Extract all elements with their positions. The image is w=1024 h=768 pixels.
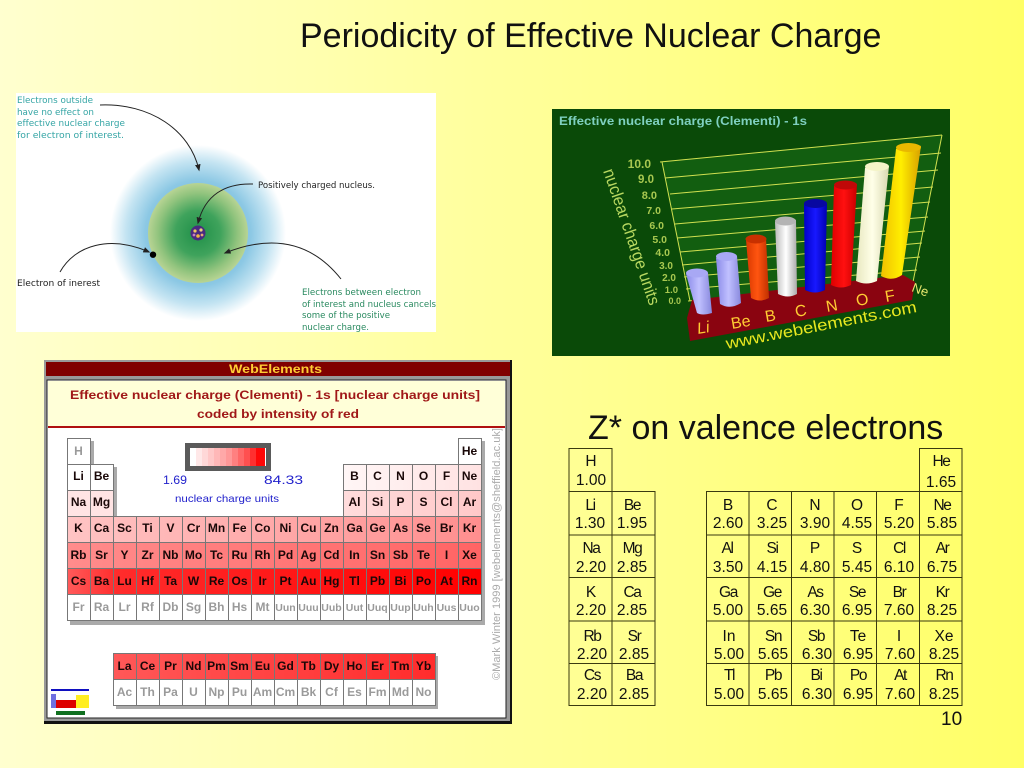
- y-axis tick labels: 2.0: [662, 273, 676, 284]
- element labels on base: C: [794, 302, 808, 321]
- period 2 values: 3.25: [757, 515, 787, 532]
- period 4 values: [576, 584, 957, 619]
- period 7 symbols: Lr: [118, 600, 131, 614]
- legend colour scale: nuclear charge units: [175, 493, 279, 505]
- y-axis tick labels: 8.0: [642, 190, 657, 202]
- period 5 values: In: [723, 628, 735, 645]
- period 3 values: S: [852, 540, 862, 557]
- chart title: Effective nuclear charge (Clementi) - 1s: [559, 116, 807, 128]
- period 6 values: Pb: [765, 667, 782, 684]
- element labels on base: N: [825, 297, 839, 316]
- lanthanides and actinides: Md: [392, 685, 409, 699]
- legend colour scale: [163, 443, 303, 505]
- element symbols: Rn: [462, 574, 478, 588]
- y-axis tick labels: 7.0: [646, 205, 661, 217]
- element symbols: Cd: [324, 548, 340, 562]
- period 5 values: 7.60: [885, 646, 915, 663]
- lanthanides and actinides: [113, 653, 438, 709]
- window title: WebElements: [229, 362, 322, 376]
- table grid: [569, 448, 962, 706]
- period 5 values: 2.20: [577, 646, 607, 663]
- period 6 values: Rn: [935, 667, 953, 684]
- period 2 values: C: [766, 497, 778, 514]
- period 5 values: Xe: [935, 628, 953, 645]
- table header: [48, 381, 505, 428]
- icon: nucleus: [190, 226, 206, 240]
- element symbols: Tc: [210, 548, 223, 562]
- period 1 values: [576, 453, 956, 491]
- element symbols: Sb: [393, 548, 408, 562]
- period 3 values: [576, 540, 957, 576]
- lanthanides and actinides: Cf: [325, 685, 339, 699]
- lanthanides and actinides: Tb: [301, 659, 316, 673]
- period 7 symbols: Uuo: [459, 602, 480, 614]
- lanthanides and actinides: Yb: [416, 659, 431, 673]
- period 4 values: Ga: [719, 584, 739, 601]
- element symbols: As: [393, 521, 408, 535]
- period 2 values: 5.20: [884, 515, 914, 532]
- lanthanides and actinides: Dy: [324, 659, 339, 673]
- electron of interest: [150, 252, 156, 258]
- period 4 values: 5.65: [757, 602, 787, 619]
- element symbols: Mg: [93, 495, 110, 509]
- period 2 values: 1.30: [575, 515, 605, 532]
- element symbols: Rh: [254, 548, 270, 562]
- label: electrons between: of interest and nucleus cancels: [302, 300, 436, 310]
- period 3 values: Al: [722, 540, 733, 557]
- period 7 symbols: Fr: [72, 600, 85, 614]
- period 5 values: Sn: [765, 628, 782, 645]
- element symbols: Xe: [462, 548, 477, 562]
- element symbols: N: [396, 469, 405, 483]
- element symbols: Ne: [462, 469, 477, 483]
- period 7 symbols: Sg: [186, 600, 201, 614]
- lanthanides and actinides: Pm: [207, 659, 226, 673]
- y-axis tick labels: 10.0: [628, 157, 651, 171]
- copyright side text: ©Mark Winter 1999 [webelements@sheffield.ac.uk]: [491, 428, 503, 680]
- period 2 values: B: [723, 497, 733, 514]
- period 6 values: Cs: [584, 667, 602, 684]
- element symbols: P: [396, 495, 405, 509]
- element symbols: Bi: [394, 574, 406, 588]
- element symbols: Sn: [370, 548, 385, 562]
- element symbols: Y: [120, 548, 129, 562]
- element symbols: I: [445, 548, 448, 562]
- element symbols: Pt: [280, 574, 292, 588]
- lanthanides and actinides: Cm: [276, 685, 295, 699]
- period 6 values: 5.65: [758, 686, 788, 703]
- lanthanides and actinides: Gd: [277, 659, 294, 673]
- arrow: outside electrons: [100, 105, 199, 170]
- period 3 values: 3.50: [713, 559, 743, 576]
- y-axis tick labels: 5.0: [652, 234, 667, 246]
- period 6 values: 2.20: [577, 686, 607, 703]
- label: electron of interest: Electron of inerest: [17, 279, 100, 289]
- period 6 values: 8.25: [929, 686, 959, 703]
- chart gridlines: [660, 135, 942, 301]
- element symbols: Ba: [94, 574, 109, 588]
- lanthanides and actinides: La: [117, 659, 132, 673]
- lanthanides and actinides: Np: [208, 685, 224, 699]
- period 1 values: H: [585, 453, 597, 470]
- period 4 values: 6.95: [842, 602, 872, 619]
- period 2 values: O: [851, 497, 863, 514]
- lanthanides and actinides: Tm: [392, 659, 410, 673]
- period 3 values: 2.85: [617, 559, 647, 576]
- element symbols: Cu: [300, 521, 316, 535]
- period 6 values: Ba: [626, 667, 644, 684]
- element symbols: Cr: [187, 521, 200, 535]
- lanthanides and actinides: Sm: [230, 659, 249, 673]
- lanthanides and actinides: Am: [253, 685, 272, 699]
- period 1 values: 1.00: [576, 472, 606, 489]
- title: Periodicity of Effective Nuclear Charge: [300, 17, 881, 55]
- legend colour scale: 1.69: [163, 473, 187, 487]
- period 7 symbols: Uun: [275, 602, 296, 614]
- element symbols: Zr: [142, 548, 154, 562]
- period 4 values: K: [586, 584, 597, 601]
- lanthanides and actinides: Nd: [186, 659, 202, 673]
- lanthanides and actinides: U: [189, 685, 198, 699]
- element symbols: Sr: [95, 548, 108, 562]
- element symbols: Zn: [324, 521, 339, 535]
- y-axis tick labels: 6.0: [649, 220, 664, 232]
- element symbols: Se: [416, 521, 431, 535]
- period 5 values: 2.85: [619, 646, 649, 663]
- label: electrons between: nuclear charge.: [302, 323, 369, 333]
- period 1 values: He: [932, 453, 950, 470]
- element symbols: O: [419, 469, 428, 483]
- label: electrons outside: have no effect on: [17, 108, 94, 118]
- cell dividers: [67, 464, 481, 620]
- element symbols: Ag: [300, 548, 316, 562]
- period 2 values: F: [894, 497, 904, 514]
- lanthanides and actinides: Pa: [163, 685, 178, 699]
- period 5 values: Te: [850, 628, 866, 645]
- lanthanides and actinides: Pu: [232, 685, 247, 699]
- y-axis tick labels: 9.0: [638, 174, 654, 186]
- period 7 symbols: Uuh: [413, 602, 434, 614]
- element symbols: Si: [372, 495, 383, 509]
- period 7 symbols: Ra: [94, 600, 109, 614]
- y-axis tick labels: 4.0: [655, 247, 670, 259]
- arrow: nucleus: [198, 184, 253, 223]
- period 5 values: 6.95: [843, 646, 873, 663]
- element labels on base: Ne: [910, 280, 931, 300]
- period 3 values: 2.20: [576, 559, 606, 576]
- periodic table main grid: [67, 438, 485, 625]
- heading: valence electrons: Z* on valence electrons: [588, 409, 943, 447]
- period 2 values: Be: [624, 497, 641, 514]
- element symbols: Ge: [369, 521, 386, 535]
- period 6 values: 6.95: [843, 686, 873, 703]
- label: electrons between: some of the positive: [302, 311, 390, 321]
- element symbols: Au: [300, 574, 316, 588]
- element symbols: Sc: [117, 521, 132, 535]
- element symbols: Ar: [463, 495, 476, 509]
- period 3 values: Mg: [623, 540, 642, 557]
- period 4 values: 5.00: [713, 602, 743, 619]
- period 5 values: Sr: [628, 628, 642, 645]
- period 4 values: Ge: [763, 584, 782, 601]
- lanthanides and actinides: Es: [347, 685, 362, 699]
- element symbols: In: [349, 548, 360, 562]
- lanthanides and actinides: Pr: [164, 659, 177, 673]
- element labels on base: [696, 280, 931, 338]
- element symbols: Ta: [164, 574, 177, 588]
- period 3 values: 5.45: [842, 559, 872, 576]
- period 3 values: Na: [582, 540, 601, 557]
- lanthanides and actinides: Bk: [301, 685, 316, 699]
- element symbols: Kr: [463, 521, 476, 535]
- y-axis tick labels: 1.0: [665, 285, 678, 296]
- panel: 3D bar chart: [552, 109, 950, 356]
- element labels on base: O: [855, 291, 870, 310]
- period 3 values: 6.10: [884, 559, 914, 576]
- period 2 values: 1.95: [617, 515, 647, 532]
- legend colour scale: 84.33: [264, 473, 303, 487]
- period 3 values: Cl: [893, 540, 906, 557]
- period 5 values: Rb: [583, 628, 601, 645]
- bars: [686, 143, 921, 314]
- period 7 symbols: Uub: [321, 602, 342, 614]
- element symbols: Ca: [94, 521, 109, 535]
- table header: Effective nuclear charge (Clementi) - 1s [nuclear charge units]: [70, 388, 480, 402]
- element symbols: Hf: [141, 574, 155, 588]
- element symbols: K: [74, 521, 83, 535]
- label: electrons outside: Electrons outside: [17, 96, 93, 106]
- element symbols: Mo: [185, 548, 202, 562]
- panel: periodic table window: [44, 360, 512, 724]
- arrow: shielding electrons: [225, 243, 341, 279]
- period 2 values: 3.90: [800, 515, 830, 532]
- icon: mini table navigator: [51, 689, 89, 715]
- period 3 values: 6.75: [927, 559, 957, 576]
- period 5 values: Sb: [808, 628, 825, 645]
- period 3 values: Si: [767, 540, 778, 557]
- element symbols: Na: [71, 495, 86, 509]
- chart back wall: [662, 135, 942, 301]
- element symbols: Ni: [280, 521, 292, 535]
- element symbols: Ir: [258, 574, 267, 588]
- period 6 values: 5.00: [714, 686, 744, 703]
- period 5 values: I: [897, 628, 901, 645]
- lanthanides and actinides: No: [416, 685, 432, 699]
- period 7 symbols: Hs: [232, 600, 247, 614]
- period 4 values: 2.20: [576, 602, 606, 619]
- element symbols: Ti: [142, 521, 153, 535]
- period 1 values: 1.65: [926, 474, 956, 491]
- y-axis title: nuclear charge units: [599, 166, 664, 308]
- period 2 values: 4.55: [842, 515, 872, 532]
- period 6 values: [577, 667, 959, 703]
- label: electrons between: [302, 288, 436, 333]
- element symbols: Te: [417, 548, 430, 562]
- lanthanides and actinides: Th: [140, 685, 155, 699]
- period 5 values: 8.25: [929, 646, 959, 663]
- label: electrons outside: effective nuclear charge: [17, 119, 125, 129]
- lanthanides and actinides: Eu: [255, 659, 270, 673]
- period 3 values: 4.15: [757, 559, 787, 576]
- lanthanides and actinides: Ce: [140, 659, 155, 673]
- chart base: [687, 275, 915, 341]
- element symbols: Al: [348, 495, 360, 509]
- period 7 symbols: Uuq: [367, 602, 388, 614]
- period 7 symbols: Rf: [141, 600, 155, 614]
- period 4 values: Se: [849, 584, 866, 601]
- element symbols: At: [440, 574, 453, 588]
- label: nucleus: Positively charged nucleus.: [258, 181, 375, 191]
- period 2 values: [575, 497, 957, 532]
- outer electron cloud: [110, 145, 286, 321]
- table shadow: [70, 441, 485, 625]
- label: electrons outside: for electron of interest.: [17, 131, 124, 141]
- period 4 values: 2.85: [617, 602, 647, 619]
- lanthanides and actinides: Ho: [346, 659, 362, 673]
- period 2 values: Ne: [933, 497, 951, 514]
- element symbols: Po: [416, 574, 431, 588]
- element symbols: S: [419, 495, 428, 509]
- y-axis tick labels: 3.0: [659, 261, 673, 272]
- lanthanides and actinides: Er: [371, 659, 384, 673]
- period 7 symbols: Uuu: [298, 602, 319, 614]
- period 6 values: At: [894, 667, 908, 684]
- period 4 values: 6.30: [800, 602, 830, 619]
- period 4 values: Ca: [623, 584, 642, 601]
- element symbols: Nb: [162, 548, 178, 562]
- element symbols: Tl: [349, 574, 360, 588]
- element symbols: Cs: [71, 574, 86, 588]
- period 7 symbols: Uus: [437, 602, 457, 614]
- element labels on base: Li: [696, 319, 711, 338]
- element symbols: Os: [231, 574, 248, 588]
- inner shielding sphere: [148, 183, 248, 283]
- element symbols: Hg: [324, 574, 340, 588]
- table: Z* on valence electrons: [569, 448, 962, 706]
- element symbols: F: [443, 469, 450, 483]
- label: electrons outside: [17, 96, 125, 141]
- element symbols: Lu: [117, 574, 132, 588]
- period 5 values: [577, 628, 959, 663]
- period 7 symbols: [72, 600, 480, 614]
- period 7 symbols: Db: [162, 600, 178, 614]
- element symbols: H: [74, 444, 83, 458]
- panel: shielding diagram: [16, 93, 436, 333]
- element symbols: Be: [94, 469, 109, 483]
- element symbols: Re: [209, 574, 224, 588]
- element symbols: Co: [254, 521, 270, 535]
- element symbols: [70, 444, 478, 588]
- period 3 values: P: [810, 540, 820, 557]
- element symbols: W: [188, 574, 200, 588]
- website label: www.webelements.com: [723, 299, 918, 353]
- period 4 values: Br: [893, 584, 907, 601]
- table header: coded by intensity of red: [197, 407, 359, 421]
- period 6 values: Tl: [724, 667, 735, 684]
- period 6 values: Bi: [811, 667, 822, 684]
- arrow: electron of interest: [60, 244, 149, 272]
- page number: 10: [941, 709, 962, 730]
- element symbols: Mn: [208, 521, 225, 535]
- period 4 values: 7.60: [884, 602, 914, 619]
- period 7 symbols: Mt: [256, 600, 270, 614]
- period 5 values: 5.65: [758, 646, 788, 663]
- element symbols: Li: [73, 469, 84, 483]
- lanthanides and actinides: Fm: [368, 685, 386, 699]
- period 5 values: 5.00: [714, 646, 744, 663]
- period 6 values: 2.85: [619, 686, 649, 703]
- element symbols: B: [350, 469, 359, 483]
- element symbols: Rb: [70, 548, 86, 562]
- element symbols: C: [373, 469, 382, 483]
- period cells: [68, 438, 482, 620]
- element symbols: Fe: [232, 521, 247, 535]
- period 6 values: 7.60: [885, 686, 915, 703]
- period 2 values: 5.85: [927, 515, 957, 532]
- element labels on base: F: [884, 287, 897, 306]
- period 7 symbols: Bh: [208, 600, 224, 614]
- element symbols: Ru: [232, 548, 248, 562]
- period 7 symbols: Uup: [390, 602, 411, 614]
- element symbols: Ga: [346, 521, 363, 535]
- y-axis tick labels: [628, 157, 681, 306]
- element symbols: Cl: [440, 495, 452, 509]
- period 2 values: 2.60: [713, 515, 743, 532]
- element symbols: He: [462, 444, 477, 458]
- period 4 values: Kr: [936, 584, 950, 601]
- period 6 values: 6.30: [802, 686, 832, 703]
- period 7 symbols: Uut: [346, 602, 364, 614]
- period 2 values: Li: [585, 497, 596, 514]
- period 3 values: 4.80: [800, 559, 830, 576]
- period 5 values: 6.30: [802, 646, 832, 663]
- element labels on base: Be: [730, 313, 752, 333]
- element symbols: V: [166, 521, 175, 535]
- period 3 values: Ar: [936, 540, 950, 557]
- element symbols: Br: [440, 521, 453, 535]
- period 2 values: N: [809, 497, 821, 514]
- period 4 values: 8.25: [927, 602, 957, 619]
- element symbols: Pd: [278, 548, 293, 562]
- lanthanides and actinides: Ac: [117, 685, 132, 699]
- period 4 values: As: [807, 584, 824, 601]
- element symbols: Pb: [370, 574, 385, 588]
- y-axis tick labels: 0.0: [668, 296, 681, 306]
- element labels on base: B: [764, 307, 777, 326]
- label: electrons between: Electrons between electron: [302, 288, 421, 298]
- period 6 values: Po: [850, 667, 867, 684]
